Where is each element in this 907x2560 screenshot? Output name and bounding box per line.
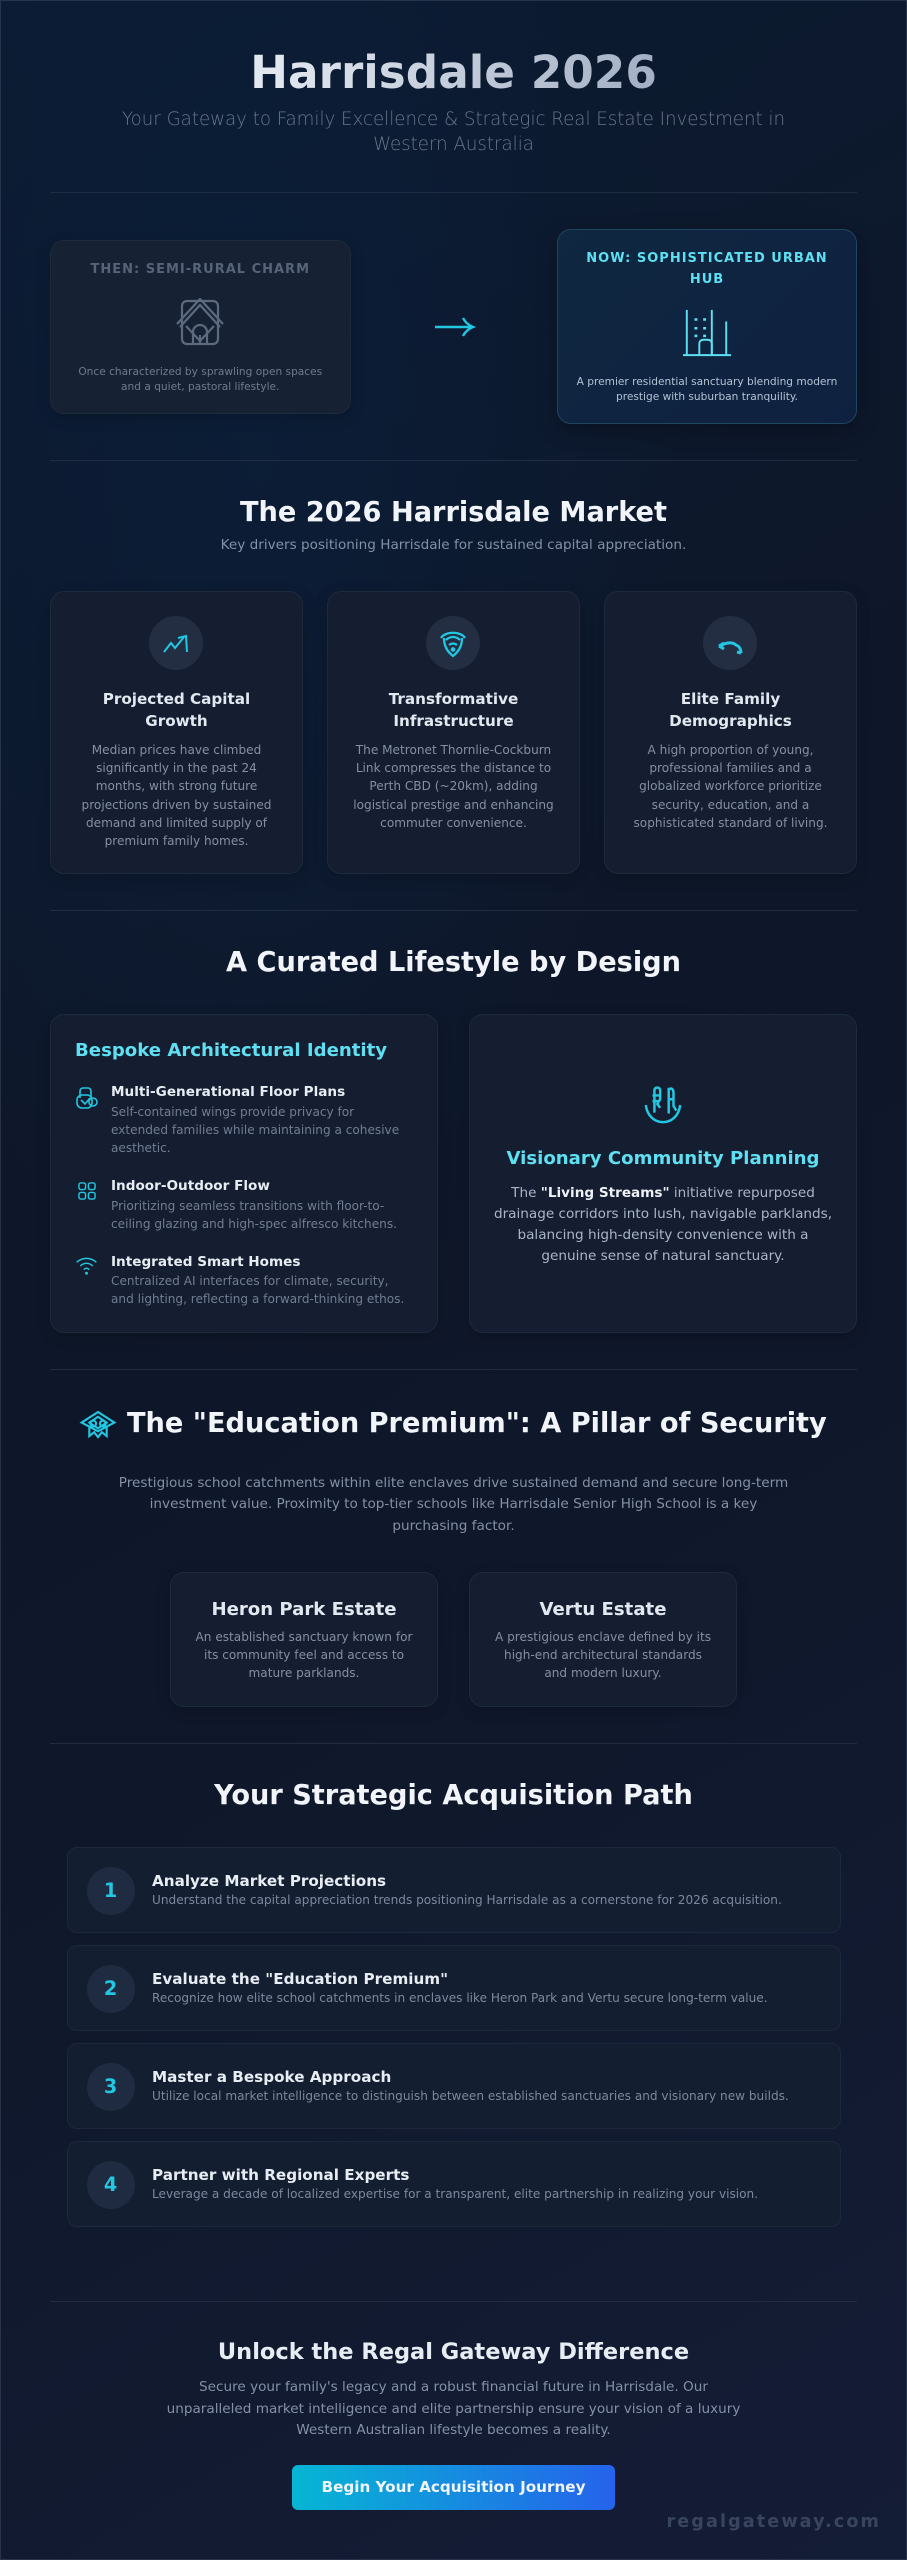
step 4: Partner with Regional Experts: [152, 2166, 409, 2184]
step 2: Recognize how elite school catchments in enclaves like Heron Park and Vertu secure long-term value.: [152, 1991, 768, 2005]
education text: Prestigious school catchments within elite enclaves drive sustained demand and secure long-term: [119, 1475, 788, 1491]
card text: Link compresses the distance to: [356, 761, 551, 775]
heading: lifestyle: A Curated Lifestyle by Design: [226, 947, 681, 978]
step 1: Analyze Market Projections: [152, 1872, 386, 1890]
closing text: unparalleled market intelligence and elite partnership ensure your vision of a luxury: [167, 2401, 740, 2417]
card text: security, education, and a: [652, 798, 809, 812]
title: [1, 46, 906, 100]
closing text: [167, 2379, 740, 2438]
community text: balancing high-density convenience with a: [517, 1227, 809, 1243]
now text: A premier residential sanctuary blending modern: [577, 376, 837, 388]
panel: community: [469, 1014, 857, 1333]
subtitle: Western Australia: [373, 134, 534, 154]
card text: significantly in the past 24: [96, 761, 257, 775]
closing text: Western Australian lifestyle becomes a reality.: [296, 2422, 611, 2438]
item: indoor outdoor: Prioritizing seamless transitions with floor-to-: [111, 1199, 384, 1213]
step 2: [66, 1945, 840, 2031]
title: Harrisdale 2026: [250, 46, 657, 99]
panel: bespoke: [50, 1014, 438, 1333]
estate title: Vertu Estate: [540, 1599, 666, 1620]
community text: drainage corridors into lush, navigable parklands,: [494, 1206, 832, 1222]
education title: The "Education Premium": A Pillar of Security: [127, 1408, 827, 1439]
card text: premium family homes.: [105, 834, 248, 848]
item: indoor outdoor: Indoor-Outdoor Flow: [111, 1178, 270, 1194]
estate text: and modern luxury.: [544, 1666, 662, 1680]
icon: floor plan: [76, 1087, 98, 1109]
item: indoor outdoor: [111, 1178, 397, 1231]
community text: [494, 1184, 832, 1264]
item: floor plans: Multi-Generational Floor Plans: [111, 1084, 345, 1100]
item: smart homes: and lighting, reflecting a forward-thinking ethos.: [111, 1292, 404, 1306]
card text: logistical prestige and enhancing: [353, 798, 554, 812]
estate text: [196, 1630, 412, 1680]
panel: capital growth: [50, 591, 303, 874]
card text: The Metronet Thornlie-Cockburn: [356, 743, 551, 757]
icon: graduation cap: [80, 1410, 116, 1439]
estate title: Heron Park Estate: [211, 1599, 397, 1620]
closing text: Secure your family's legacy and a robust financial future in Harrisdale. Our: [199, 2379, 708, 2395]
panel: heron park: [170, 1572, 438, 1707]
education text: purchasing factor.: [392, 1518, 515, 1534]
icon: shield wifi: [426, 616, 480, 670]
icon: house: [176, 298, 224, 346]
then text: [78, 366, 322, 393]
now heading: [586, 251, 828, 287]
step 1: Understand the capital appreciation trends positioning Harrisdale as a cornerstone for 2026 acquisition.: [152, 1893, 782, 1907]
item: floor plans: extended families while maintaining a cohesive: [111, 1123, 399, 1137]
education text: investment value. Proximity to top-tier schools like Harrisdale Senior High School is a key: [150, 1496, 757, 1512]
estate text: [495, 1630, 711, 1680]
step 4: [66, 2141, 840, 2227]
panel: now: [557, 229, 857, 424]
subtitle: [122, 109, 785, 154]
item: smart homes: Integrated Smart Homes: [111, 1254, 300, 1270]
panel: demographics: [604, 591, 857, 874]
community text: The "Living Streams" initiative repurposed: [511, 1184, 815, 1200]
step 3: Master a Bespoke Approach: [152, 2068, 391, 2086]
icon: building: [682, 310, 732, 356]
community heading: Visionary Community Planning: [506, 1148, 820, 1169]
step 2: Evaluate the "Education Premium": [152, 1970, 448, 1988]
estate text: high-end architectural standards: [504, 1648, 702, 1662]
heading: path: Your Strategic Acquisition Path: [214, 1780, 693, 1811]
arrow: [435, 318, 476, 336]
item: floor plans: aesthetic.: [111, 1141, 171, 1155]
step 4: 4: [104, 2172, 117, 2196]
estate text: mature parklands.: [249, 1666, 359, 1680]
header: [122, 46, 785, 154]
estate text: its community feel and access to: [204, 1648, 404, 1662]
card text: globalized workforce prioritize: [639, 779, 822, 793]
card text: [82, 743, 271, 848]
card title: Infrastructure: [393, 712, 514, 730]
card title: Growth: [145, 712, 208, 730]
card text: projections driven by sustained: [82, 798, 271, 812]
card text: professional families and a: [649, 761, 812, 775]
card title: [388, 690, 518, 730]
step 3: [66, 2043, 840, 2129]
now heading: HUB: [690, 272, 724, 287]
icon: curved arrow: [703, 616, 757, 670]
now heading: NOW: SOPHISTICATED URBAN: [586, 251, 828, 266]
item: floor plans: [111, 1084, 399, 1155]
card title: Transformative: [389, 690, 518, 708]
then text: and a quiet, pastoral lifestyle.: [121, 381, 279, 393]
heading: unlock: Unlock the Regal Gateway Difference: [218, 2339, 689, 2365]
subtitle: Your Gateway to Family Excellence & Strategic Real Estate Investment in: [122, 109, 785, 130]
button: Begin Your Acquisition Journey: [322, 2478, 585, 2496]
card text: Median prices have climbed: [92, 743, 261, 757]
item: floor plans: Self-contained wings provide privacy for: [111, 1105, 354, 1119]
card text: [353, 743, 554, 830]
item: smart homes: Centralized AI interfaces for climate, security,: [111, 1274, 389, 1288]
panel: then: [50, 240, 350, 414]
card text: A high proportion of young,: [647, 743, 814, 757]
estate text: A prestigious enclave defined by its: [495, 1630, 711, 1644]
market subtitle: Key drivers positioning Harrisdale for sustained capital appreciation.: [221, 537, 686, 553]
heading: market: The 2026 Harrisdale Market: [240, 497, 667, 528]
card text: Perth CBD (~20km), adding: [369, 779, 538, 793]
item: smart homes: [111, 1254, 404, 1306]
card title: Projected Capital: [103, 690, 250, 708]
card text: months, with strong future: [96, 779, 257, 793]
button: [292, 2465, 615, 2510]
icon: trend: [149, 616, 203, 670]
then heading: THEN: SEMI-RURAL CHARM: [90, 262, 310, 277]
estate text: An established sanctuary known for: [196, 1630, 412, 1644]
card text: sophisticated standard of living.: [634, 816, 827, 830]
step 3: Utilize local market intelligence to distinguish between established sanctuaries and visionary new builds.: [152, 2089, 789, 2103]
card title: [103, 690, 250, 730]
heading: education: [80, 1408, 827, 1439]
icon: grid: [78, 1182, 96, 1200]
icon: streams: [644, 1086, 682, 1124]
card title: [669, 690, 792, 730]
step 3: 3: [104, 2074, 117, 2098]
watermark: regalgateway.com: [666, 2512, 881, 2532]
card text: commuter convenience.: [380, 816, 527, 830]
step 2: 2: [104, 1976, 117, 2000]
card title: Demographics: [669, 712, 792, 730]
step 1: 1: [104, 1878, 117, 1902]
community text: genuine sense of natural sanctuary.: [541, 1248, 785, 1264]
card title: Elite Family: [681, 690, 780, 708]
then text: Once characterized by sprawling open spaces: [78, 366, 322, 378]
icon: wifi: [76, 1258, 97, 1275]
now text: prestige with suburban tranquility.: [616, 391, 798, 403]
step 4: Leverage a decade of localized expertise for a transparent, elite partnership in realizing your vision.: [152, 2187, 758, 2201]
panel: infrastructure: [327, 591, 580, 874]
card text: demand and limited supply of: [86, 816, 267, 830]
now text: [576, 376, 837, 403]
panel: vertu: [469, 1572, 737, 1707]
card text: [634, 743, 827, 830]
item: indoor outdoor: ceiling glazing and high-spec alfresco kitchens.: [111, 1217, 397, 1231]
bespoke heading: Bespoke Architectural Identity: [75, 1040, 387, 1061]
education text: [119, 1475, 788, 1534]
step 1: [66, 1847, 840, 1933]
